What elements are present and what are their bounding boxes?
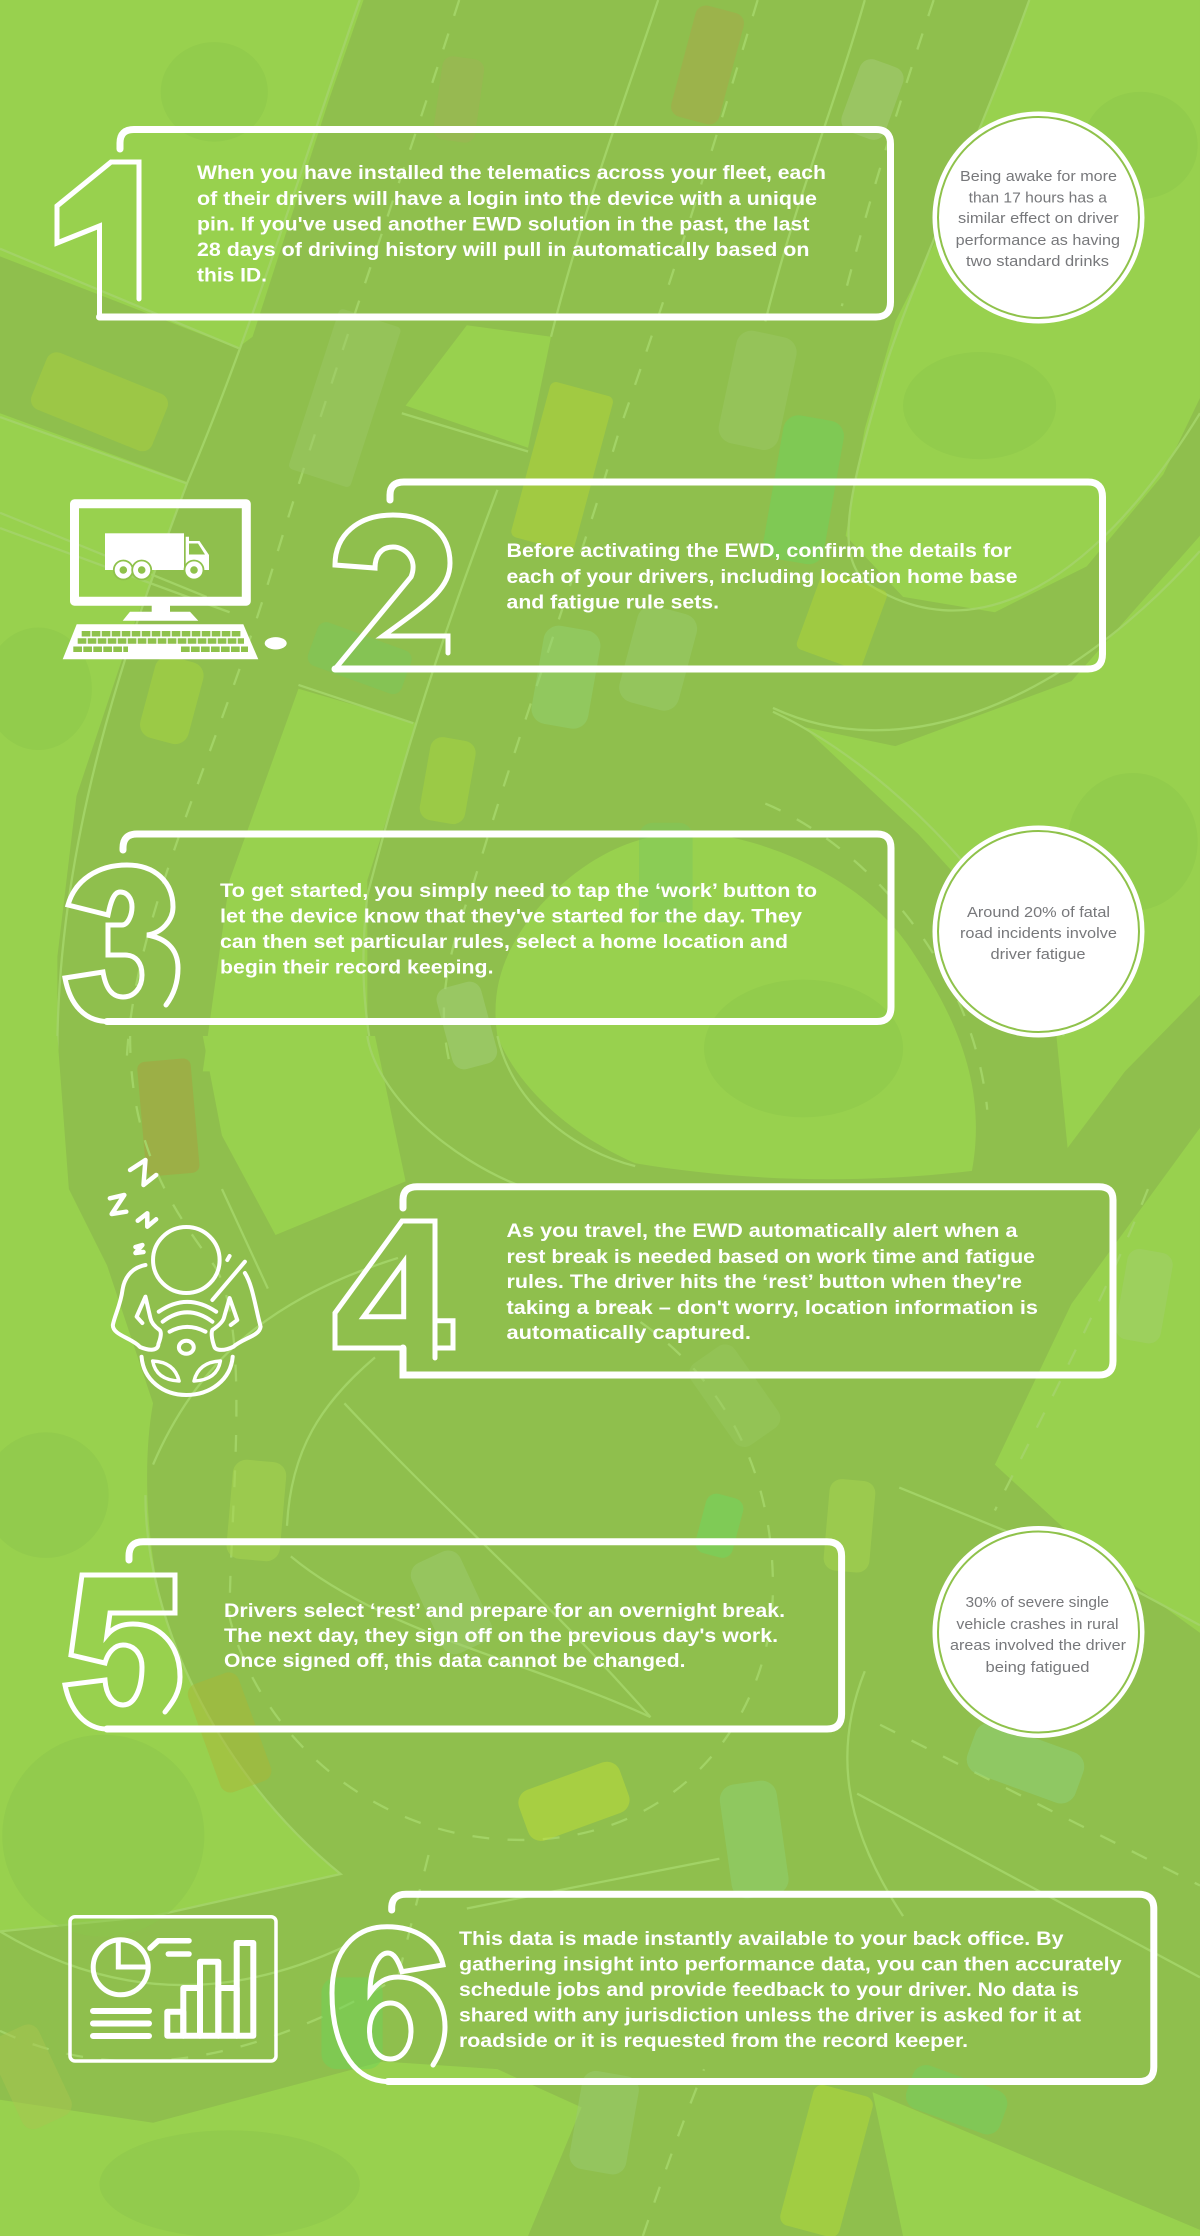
mouse bbox=[265, 637, 287, 650]
callout: 20% of fatal incidents bbox=[932, 826, 1144, 1038]
seat belt bbox=[212, 1256, 245, 1300]
callout: 20% of fatal incidents: driver fatigue bbox=[990, 946, 1086, 963]
step 4 text: rest break is needed based on work time and fatigue bbox=[506, 1246, 1035, 1268]
callout: awake 17 hours: similar effect on driver bbox=[958, 210, 1119, 227]
dashboard frame bbox=[70, 1917, 276, 2061]
panel: step 1 bbox=[57, 130, 890, 317]
monitor stand bbox=[123, 605, 198, 621]
callout: awake 17 hours: performance as having bbox=[956, 232, 1120, 249]
step 1 text: 28 days of driving history will pull in automatically based on bbox=[197, 239, 810, 261]
callout: 20% of fatal incidents: road incidents involve bbox=[960, 925, 1117, 942]
callout: 20% of fatal incidents: Around 20% of fatal bbox=[967, 904, 1110, 921]
frame: step 6 bbox=[388, 1894, 1154, 2082]
number 3 bbox=[65, 865, 178, 1022]
frame: step 5 bbox=[107, 1542, 842, 1729]
body and hands bbox=[113, 1265, 161, 1350]
step 2 text: each of your drivers, including location home base bbox=[506, 566, 1018, 588]
text lines bbox=[93, 2011, 149, 2036]
callout: awake 17 hours: Being awake for more bbox=[960, 168, 1117, 185]
step 4 text: rules. The driver hits the ‘rest’ button when they're bbox=[506, 1271, 1022, 1293]
icon: sleepy driver at wheel bbox=[110, 1160, 261, 1395]
step 1 text bbox=[197, 162, 826, 286]
panel: step 2 bbox=[335, 482, 1102, 669]
callout: 30% of rural crashes: being fatigued bbox=[986, 1659, 1090, 1676]
icon: computer with truck bbox=[63, 504, 287, 659]
panel: step 3 bbox=[65, 834, 891, 1022]
step 5 text: Once signed off, this data cannot be changed. bbox=[224, 1650, 686, 1672]
frame: step 2 bbox=[335, 482, 1102, 669]
number 4 bbox=[335, 1221, 453, 1358]
step 3 text bbox=[220, 880, 817, 978]
step 4 text: automatically captured. bbox=[506, 1322, 751, 1344]
step 1 text: of their drivers will have a login into the device with a unique bbox=[197, 188, 817, 210]
frame: step 1 bbox=[100, 130, 890, 317]
sleep letters bbox=[110, 1160, 156, 1253]
bar chart bbox=[167, 1943, 253, 2036]
step 6 text: gathering insight into performance data, you can then accurately bbox=[459, 1954, 1122, 1976]
step 3 text: let the device know that they've started for the day. They bbox=[220, 906, 802, 928]
callout: awake 17 hours bbox=[932, 112, 1144, 324]
step 4 text: As you travel, the EWD automatically alert when a bbox=[506, 1220, 1018, 1242]
frame: step 3 bbox=[107, 834, 891, 1022]
step 6 text: roadside or it is requested from the record keeper. bbox=[459, 2030, 968, 2052]
number 6 bbox=[332, 1927, 445, 2082]
callout: 30% of rural crashes: areas involved the driver bbox=[950, 1637, 1126, 1654]
keyboard bbox=[63, 624, 258, 659]
step 3 text: can then set particular rules, select a home location and bbox=[220, 931, 788, 953]
head bbox=[153, 1227, 220, 1293]
step 6 text: schedule jobs and provide feedback to your driver. No data is bbox=[459, 1979, 1079, 2001]
step 3 text: To get started, you simply need to tap the ‘work’ button to bbox=[220, 880, 817, 902]
pie chart bbox=[93, 1940, 148, 1995]
callout: 30% of rural crashes: vehicle crashes in rural bbox=[956, 1616, 1119, 1633]
step 2 text: Before activating the EWD, confirm the details for bbox=[506, 540, 1012, 562]
step 5 text: Drivers select ‘rest’ and prepare for an overnight break. bbox=[224, 1600, 785, 1622]
step 1 text: When you have installed the telematics across your fleet, each bbox=[197, 162, 826, 184]
truck bbox=[105, 533, 209, 580]
steering wheel bbox=[142, 1302, 233, 1395]
step 5 text bbox=[224, 1600, 785, 1672]
callout: awake 17 hours: than 17 hours has a bbox=[969, 190, 1108, 206]
step 4 text: taking a break – don't worry, location information is bbox=[506, 1297, 1038, 1319]
icon: analytics dashboard bbox=[70, 1917, 276, 2061]
legend lines bbox=[150, 1941, 189, 1954]
monitor bbox=[74, 504, 246, 601]
number 2 bbox=[335, 515, 450, 669]
step 6 text: This data is made instantly available to your back office. By bbox=[459, 1928, 1064, 1950]
number 1 bbox=[57, 162, 139, 317]
step 6 text: shared with any jurisdiction unless the driver is asked for it at bbox=[459, 2004, 1082, 2026]
callout: 30% of rural crashes: 30% of severe single bbox=[966, 1594, 1109, 1611]
callout: 30% of rural crashes bbox=[932, 1526, 1144, 1738]
step 2 text bbox=[506, 540, 1018, 614]
panel: step 5 bbox=[65, 1542, 842, 1729]
panel: step 6 bbox=[332, 1894, 1154, 2082]
panel: step 4 bbox=[335, 1187, 1113, 1375]
step 5 text: The next day, they sign off on the previous day's work. bbox=[224, 1625, 778, 1647]
step 2 text: and fatigue rule sets. bbox=[506, 592, 719, 614]
number 5 bbox=[65, 1575, 180, 1729]
step 1 text: pin. If you've used another EWD solution in the past, the last bbox=[197, 214, 810, 236]
step 6 text bbox=[459, 1928, 1122, 2052]
step 1 text: this ID. bbox=[197, 264, 267, 286]
frame: step 4 bbox=[403, 1187, 1113, 1375]
callout: awake 17 hours: two standard drinks bbox=[966, 253, 1109, 270]
step 4 text bbox=[506, 1220, 1038, 1344]
step 3 text: begin their record keeping. bbox=[220, 956, 494, 978]
